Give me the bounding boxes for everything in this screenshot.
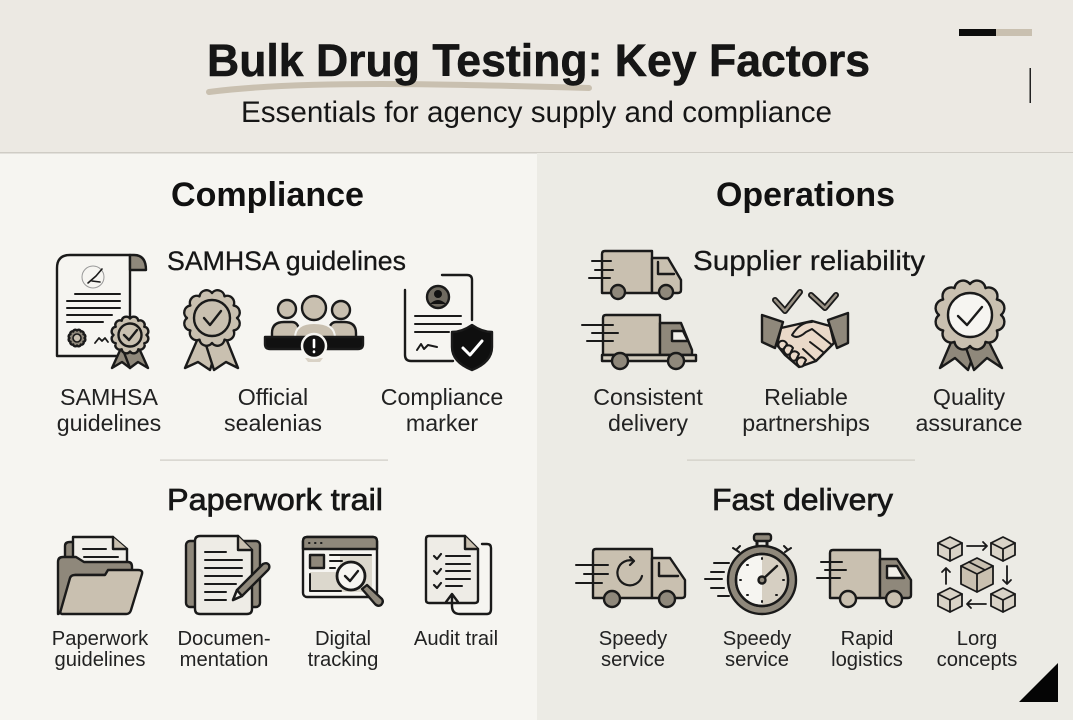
label: quality assurance: assurance [916, 410, 1022, 436]
label: speedy service two: service [725, 649, 789, 671]
subheading: fast delivery: Fast delivery [712, 482, 894, 517]
corner accent line [1030, 68, 1031, 103]
label: paperwork guidelines: guidelines [55, 649, 145, 671]
divider [687, 460, 915, 461]
label: documentation: mentation [180, 649, 268, 671]
label: long concepts: concepts [937, 649, 1017, 671]
label: audit trail: Audit trail [414, 628, 498, 650]
panel: operations [576, 176, 1058, 702]
label: official sealenias: Official [238, 384, 308, 410]
label: digital tracking: tracking [308, 649, 378, 671]
subheading: SAMHSA guidelines: SAMHSA guidelines [167, 246, 406, 276]
icon: rapid logistics truck [817, 550, 911, 607]
icon: official seal [184, 290, 240, 370]
label: paperwork guidelines: Paperwork [52, 628, 149, 650]
heading: operations: Operations [716, 176, 895, 214]
label: speedy service two: Speedy [723, 628, 792, 650]
icon: open folder [58, 537, 142, 614]
icon: delivery truck one [589, 251, 681, 299]
icon: handshake with checks [762, 292, 848, 367]
label: reliable partnerships: Reliable [764, 384, 848, 410]
label: reliable partnerships: partnerships [742, 410, 870, 436]
label: speedy service one: service [601, 649, 665, 671]
icon: certificate with seal [57, 255, 148, 368]
label: compliance marker: marker [406, 410, 478, 436]
panel: operations background [537, 153, 1073, 720]
label: official sealenias: sealenias [224, 410, 322, 436]
corner accent bar [959, 29, 1032, 36]
label: documentation: Documen- [177, 628, 271, 650]
corner triangle [1019, 663, 1058, 702]
icon: group with alert [265, 296, 363, 362]
label: quality assurance: Quality [933, 384, 1005, 410]
icon: speedy truck with refresh arrow [576, 549, 685, 607]
label: rapid logistics: Rapid [841, 628, 893, 650]
label: long concepts: Lorg [957, 628, 997, 650]
label: consistent delivery: delivery [608, 410, 688, 436]
label: digital tracking: Digital [315, 628, 371, 650]
icon: compliance document with shield [405, 275, 492, 370]
title: Bulk Drug Testing: Key Factors [207, 35, 870, 86]
icon: logistics boxes cycle [938, 537, 1015, 612]
subtitle: Essentials for agency supply and compliance [241, 96, 832, 129]
title underline stroke [209, 84, 589, 92]
icon: digital tracking window [303, 537, 383, 606]
label: speedy service one: Speedy [599, 628, 668, 650]
panel: compliance [52, 176, 503, 671]
icon: documentation with pencil [186, 536, 269, 614]
header band [0, 0, 1073, 154]
subheading: paperwork trail: Paperwork trail [167, 482, 383, 517]
icon: stopwatch [705, 534, 796, 614]
label: SAMHSA guidelines: SAMHSA [60, 384, 158, 410]
heading: compliance: Compliance [171, 176, 364, 214]
label: rapid logistics: logistics [831, 649, 903, 671]
subheading: supplier reliability: Supplier reliability [693, 245, 925, 276]
icon: audit trail checklist [426, 536, 491, 614]
label: SAMHSA guidelines: guidelines [57, 410, 161, 436]
icon: quality assurance medal [936, 281, 1004, 370]
icon: delivery truck two [582, 315, 696, 369]
label: compliance marker: Compliance [381, 384, 503, 410]
label: consistent delivery: Consistent [593, 384, 703, 410]
divider [160, 460, 388, 461]
